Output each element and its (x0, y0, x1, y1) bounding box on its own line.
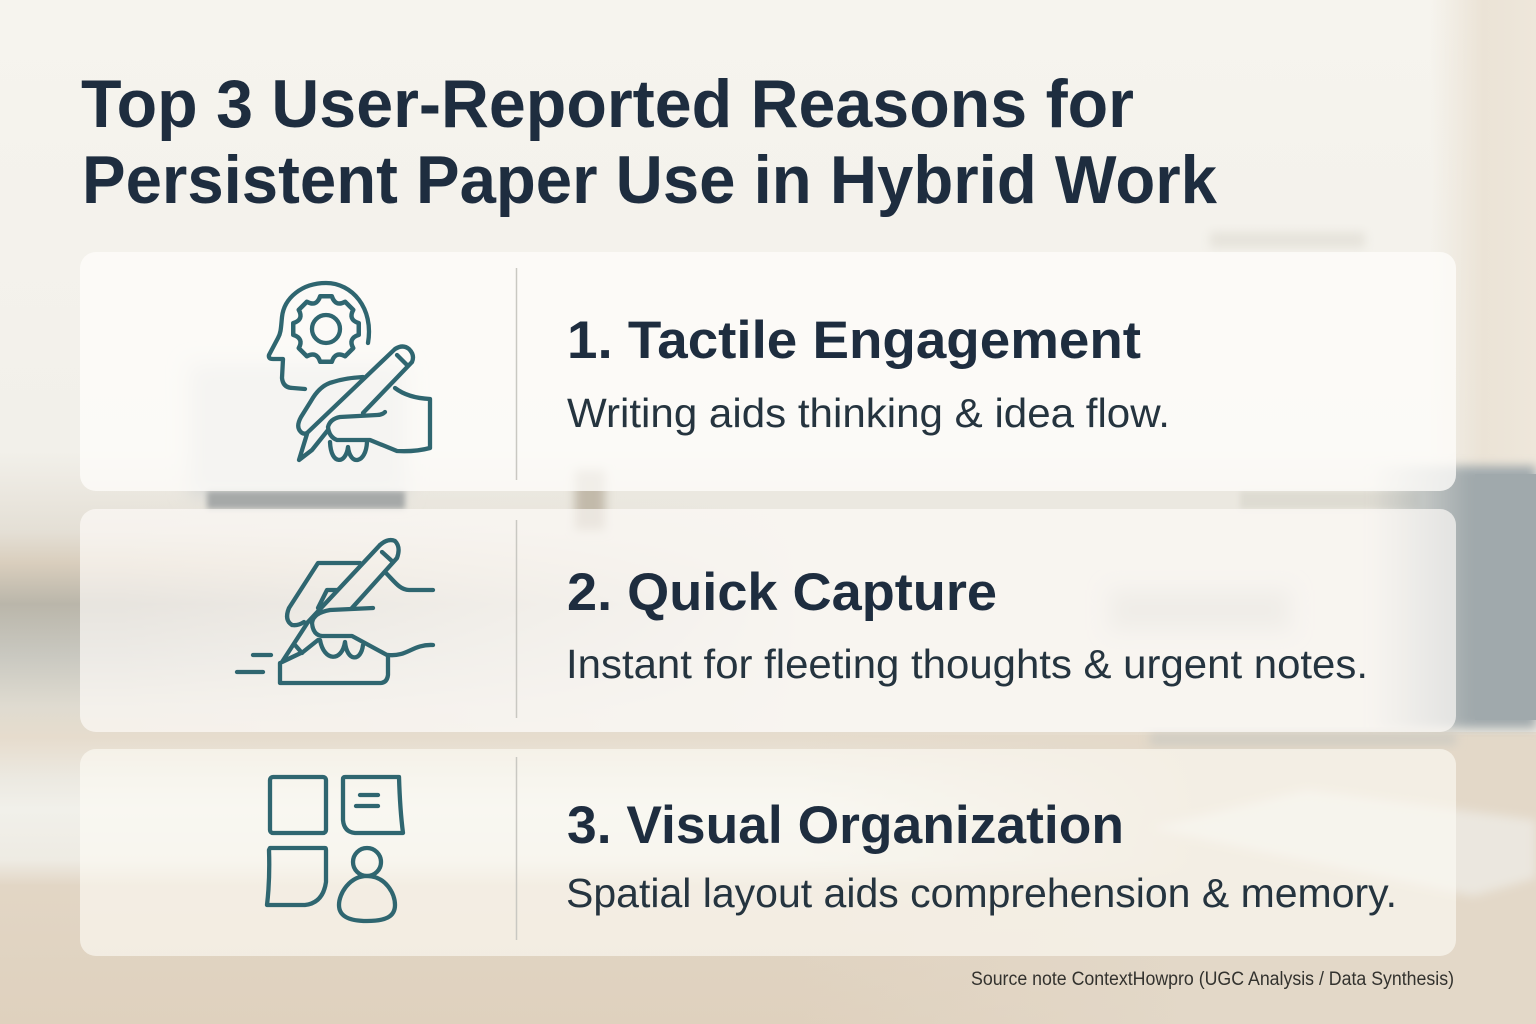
description: quick capture: Instant for fleeting thoughts & urgent notes. (566, 641, 1368, 687)
description: tactile engagement: Writing aids thinking & idea flow. (567, 390, 1170, 436)
title: Top 3 User-Reported Reasons for (81, 66, 1134, 142)
heading: tactile engagement: 1. Tactile Engagement (567, 311, 1141, 370)
panel: quick capture (80, 509, 1456, 732)
panel: visual organization (80, 749, 1456, 956)
description: visual organization: Spatial layout aids comprehension & memory. (566, 870, 1397, 916)
icon: hand quickly writing (237, 540, 433, 683)
heading: quick capture: 2. Quick Capture (567, 563, 997, 622)
icon: notes and person grid (267, 777, 403, 921)
title: Persistent Paper Use in Hybrid Work (82, 142, 1217, 218)
source note: Source note ContextHowpro (UGC Analysis / Data Synthesis) (971, 969, 1454, 990)
title (81, 66, 1217, 218)
icon: head with gear and writing hand (269, 283, 430, 460)
panel: tactile engagement (80, 252, 1456, 491)
heading: visual organization: 3. Visual Organization (567, 796, 1124, 855)
